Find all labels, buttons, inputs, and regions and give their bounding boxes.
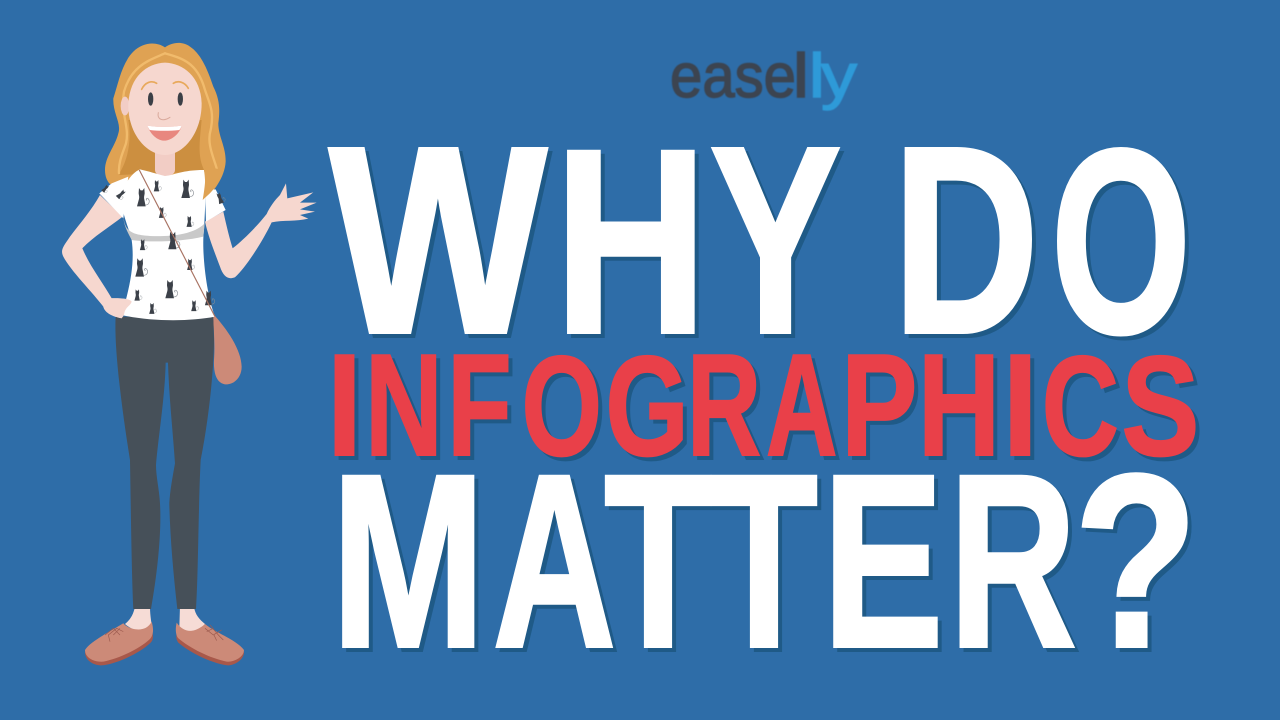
- title line: MATTER?: T: [604, 424, 712, 699]
- title line: WHY DO: O: [1051, 95, 1191, 388]
- ear: [121, 97, 129, 115]
- title line: MATTER?: M: [331, 424, 485, 699]
- title line: MATTER?: A: [493, 424, 616, 699]
- title line: INFOGRAPHICS: N: [365, 324, 443, 486]
- cat pattern: [101, 180, 226, 314]
- hair shadow: [118, 120, 205, 175]
- title line: INFOGRAPHICS: G: [606, 327, 689, 486]
- title line: INFOGRAPHICS: A: [766, 324, 837, 486]
- title line: MATTER?: E: [823, 424, 943, 699]
- title line: INFOGRAPHICS: I: [327, 324, 362, 486]
- nose: [158, 113, 170, 120]
- trousers: [115, 317, 214, 609]
- title line: INFOGRAPHICS: F: [447, 324, 512, 486]
- left arm: [62, 195, 132, 318]
- title line: INFOGRAPHICS: H: [918, 324, 1000, 486]
- title line: INFOGRAPHICS: I: [1003, 324, 1038, 486]
- right arm and hand: [205, 183, 317, 278]
- eyebrows: [142, 82, 188, 89]
- mouth: [147, 126, 182, 141]
- shirt shading: [123, 217, 205, 241]
- title line: MATTER?: T: [710, 424, 818, 699]
- upper body: [62, 43, 317, 320]
- hair back: [105, 43, 226, 200]
- left shoe: [85, 622, 153, 665]
- title line: WHY DO: W: [329, 92, 549, 389]
- title: [327, 92, 1199, 699]
- hair highlights: [119, 53, 217, 173]
- logo: easelly: l: [809, 42, 825, 111]
- bag: [213, 313, 242, 384]
- right shoe: [176, 623, 244, 665]
- title line: INFOGRAPHICS: S: [1122, 327, 1199, 486]
- logo: easelly: ease: [670, 42, 796, 111]
- neck: [155, 147, 175, 176]
- title line: INFOGRAPHICS: O: [522, 327, 602, 486]
- bag strap: [139, 170, 215, 317]
- title line: WHY DO: Y: [710, 92, 839, 389]
- logo: easelly: l: [793, 42, 809, 111]
- sleeves: [99, 177, 226, 222]
- title line: INFOGRAPHICS: C: [1042, 327, 1119, 486]
- shirt: [99, 169, 226, 320]
- logo: easelly: y: [821, 42, 857, 111]
- illustration: woman character: [62, 43, 317, 665]
- face: [128, 63, 202, 155]
- socks: [125, 607, 205, 631]
- title line: WHY DO: H: [554, 95, 707, 388]
- title line: MATTER?: R: [949, 424, 1076, 699]
- title line: WHY DO: D: [893, 92, 1039, 389]
- eyes: [148, 92, 183, 106]
- title line: MATTER?: ?: [1074, 424, 1198, 699]
- fingers on hip: [103, 298, 132, 318]
- title line: INFOGRAPHICS: R: [687, 324, 761, 486]
- legs, bag and shoes: [85, 313, 244, 665]
- title line: INFOGRAPHICS: P: [841, 324, 917, 486]
- hair front tip: [203, 167, 224, 200]
